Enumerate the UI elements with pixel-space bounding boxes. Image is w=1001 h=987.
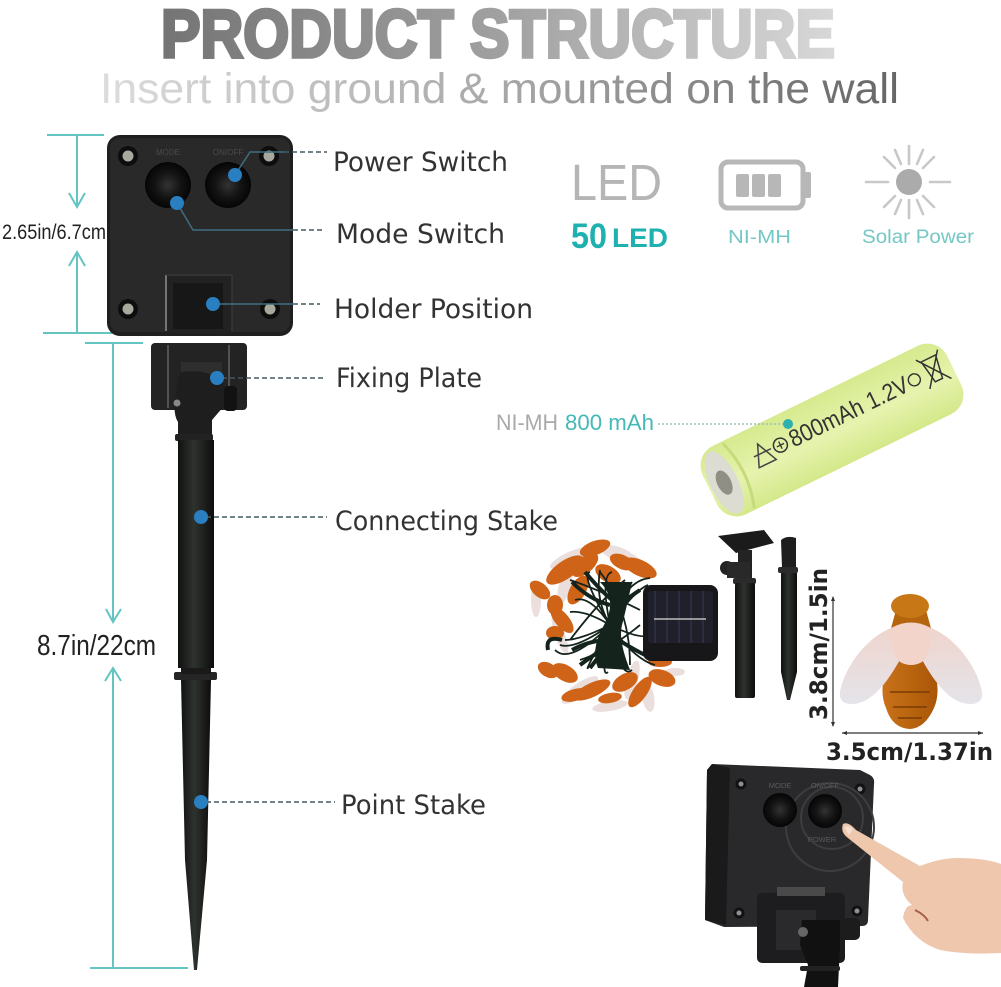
callout: holder position [206,294,533,325]
callout: power switch: Power Switch [333,147,508,178]
callout: connecting stake: Connecting Stake [335,506,558,537]
switch buttons [763,781,842,844]
bee abdomen [882,658,938,729]
callout: mode switch: Mode Switch [336,219,505,250]
fixing plate [151,343,247,438]
bee wings [840,622,982,704]
battery photo [693,336,971,524]
dimension: stake height 8.7in/22cm: 8.7in/22cm [37,630,156,662]
callout: NI-MH 800 mAh: 800 mAh [565,410,654,435]
callout: mode switch [170,196,505,250]
callout: fixing plate: Fixing Plate [336,363,482,394]
battery photo: 800mAh 1.2V [785,372,913,453]
stake parts [718,530,798,700]
bee lights [526,536,685,714]
point stake part [778,537,798,700]
connecting stake part [718,530,774,698]
subtitle: Insert into ground & mounted on the wall [100,65,899,113]
feature: 50 LED: LED [571,154,662,211]
dimension: housing height 2.65in/6.7cm [2,135,112,333]
switch buttons: POWER [808,835,837,844]
connecting stake [175,434,214,668]
black wires [548,570,655,673]
switch buttons: ON/OFF [213,148,243,157]
mount bracket [757,887,860,987]
callout: NI-MH 800 mAh: NI-MH [496,410,558,435]
feature: 50 LED: LED [612,223,668,253]
holder recess [165,275,232,333]
switch buttons [145,148,251,208]
point stake [174,668,217,970]
dimension: housing height 2.65in/6.7cm: 2.65in/6.7cm [2,221,106,244]
callout: holder position: Holder Position [334,294,533,325]
switch buttons: MODE [156,148,180,157]
feature: 50 LED [571,154,668,256]
feature: NI-MH battery [721,162,811,247]
callout: point stake [194,790,486,821]
touch demo: switch panel [705,764,874,987]
icon: screws [735,780,864,917]
switch buttons: ON/OFF [811,781,840,790]
solar panel [643,585,718,661]
callout: power switch [228,147,508,182]
feature: solar power: Solar Power [862,227,975,248]
pointing hand [842,823,1001,954]
dimension: stake height 8.7in/22cm [37,343,188,968]
icon: screws [118,146,280,319]
callout: point stake: Point Stake [341,790,486,821]
feature: solar power [862,146,975,248]
callout: connecting stake [194,506,558,537]
dimension: 3.5cm/1.37in: 3.5cm/1.37in [826,738,993,766]
bee light with dimensions [805,568,993,766]
feature: NI-MH battery: NI-MH [728,227,791,247]
callout: NI-MH 800 mAh [496,410,793,435]
touch ripples [786,783,874,871]
callout: fixing plate [210,363,482,394]
stake assembly [151,343,247,970]
string lights bundle [526,536,718,714]
solar box back panel [107,135,293,336]
dimension: 3.8cm/1.5in: 3.8cm/1.5in [805,568,833,720]
switch buttons: MODE [769,781,791,790]
bee head and thorax [890,594,932,632]
feature: 50 LED: 50 [571,217,607,256]
